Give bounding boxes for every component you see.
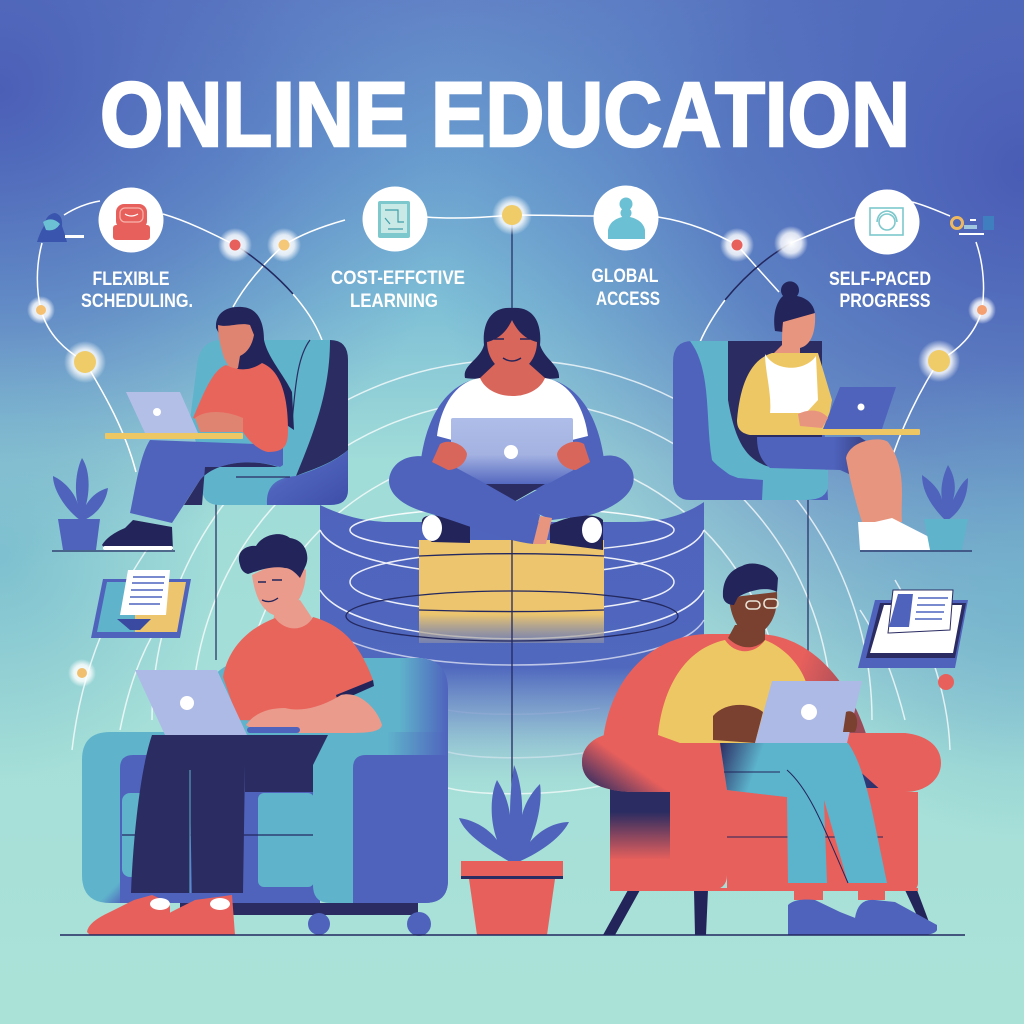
neck xyxy=(480,362,545,396)
glasses xyxy=(746,599,778,609)
legs xyxy=(130,440,283,523)
seat xyxy=(727,788,887,890)
feature: cost-effective learning xyxy=(331,186,465,312)
right side xyxy=(883,792,918,890)
chair back xyxy=(419,378,606,490)
neck xyxy=(273,600,312,631)
seat shadow xyxy=(245,735,313,792)
icon: small left device xyxy=(37,213,84,242)
feature: self-paced progress xyxy=(829,190,931,312)
laptop xyxy=(126,392,198,433)
label: COST-EFFCTIVE xyxy=(331,268,465,289)
chair: top left xyxy=(190,340,348,505)
title: ONLINE EDUCATION xyxy=(100,64,910,166)
feature: global access: ACCESS xyxy=(596,289,660,310)
icon: small right device xyxy=(952,216,994,235)
right arm xyxy=(313,732,448,903)
hair xyxy=(239,534,307,578)
neck xyxy=(728,625,765,647)
book: right xyxy=(858,590,968,690)
armchair: bottom right xyxy=(582,634,941,935)
armchair: bottom left xyxy=(82,658,448,936)
shoes xyxy=(788,900,873,935)
student: bottom right xyxy=(658,563,937,935)
legs xyxy=(720,743,887,883)
book: left xyxy=(91,570,191,638)
central drum xyxy=(320,502,704,880)
concentric rings xyxy=(72,360,950,794)
student: center xyxy=(389,308,634,550)
ankle xyxy=(533,516,552,544)
icon: tablet map xyxy=(378,201,410,238)
plant: bottom center xyxy=(459,765,569,935)
feature: cost-effective learning: LEARNING xyxy=(350,291,438,312)
icon: monitor head xyxy=(870,208,903,235)
shoes xyxy=(102,520,173,550)
back xyxy=(205,658,448,760)
shirt xyxy=(223,617,373,723)
legs xyxy=(757,437,885,490)
inner xyxy=(120,755,320,903)
shoes xyxy=(858,518,935,550)
hair xyxy=(723,563,778,605)
hair xyxy=(774,281,815,332)
label: GLOBAL xyxy=(592,266,659,287)
feature: flexible scheduling xyxy=(81,188,193,312)
shoes xyxy=(422,515,470,543)
connector lines xyxy=(216,222,808,660)
sweater xyxy=(658,640,806,743)
student: top left xyxy=(102,307,294,550)
left leg xyxy=(389,456,540,544)
floor line xyxy=(60,934,965,936)
under laptop xyxy=(480,484,545,503)
hair xyxy=(216,307,294,430)
desk xyxy=(783,429,920,435)
legs xyxy=(603,890,929,935)
plant: left small xyxy=(52,458,175,551)
hands xyxy=(432,442,467,470)
laptop xyxy=(755,681,862,743)
glowing nodes xyxy=(27,195,996,687)
left arm xyxy=(82,732,200,903)
left side panel xyxy=(610,770,694,890)
chair: top right xyxy=(673,341,828,500)
right leg xyxy=(513,456,634,520)
sweater xyxy=(193,363,288,452)
dark inner xyxy=(727,743,883,793)
shirt xyxy=(437,378,588,480)
base and wheels xyxy=(180,903,418,915)
head xyxy=(487,320,537,373)
head xyxy=(771,313,815,368)
hair xyxy=(465,308,559,379)
head xyxy=(218,324,254,372)
head xyxy=(730,592,777,637)
icon: person with globe xyxy=(608,198,645,239)
legs xyxy=(131,735,328,893)
icon: red seat xyxy=(113,204,150,240)
label: SELF-PACED xyxy=(829,269,931,290)
hand xyxy=(798,411,828,428)
white top xyxy=(765,354,818,413)
shoes xyxy=(87,895,170,935)
head xyxy=(252,564,306,616)
feature: self-paced progress: PROGRESS xyxy=(840,291,930,312)
socks xyxy=(794,888,885,900)
back xyxy=(603,634,868,780)
feature: global access xyxy=(592,186,660,310)
base xyxy=(610,888,918,891)
network arcs xyxy=(37,201,984,472)
cardigan xyxy=(737,353,832,435)
left arm xyxy=(582,733,727,890)
laptop xyxy=(451,418,573,484)
student: bottom left xyxy=(87,534,382,935)
laptop xyxy=(823,387,896,429)
hand xyxy=(195,412,243,432)
laptop xyxy=(135,670,247,735)
hands xyxy=(713,705,763,743)
student: top right xyxy=(737,281,935,550)
plant: right small xyxy=(860,465,972,551)
label: FLEXIBLE xyxy=(92,269,170,290)
desk xyxy=(105,433,243,439)
face features xyxy=(494,339,530,361)
face features xyxy=(258,580,282,602)
arm xyxy=(246,694,382,733)
feature: flexible scheduling: SCHEDULING. xyxy=(81,291,193,312)
dark line segments xyxy=(240,243,791,300)
